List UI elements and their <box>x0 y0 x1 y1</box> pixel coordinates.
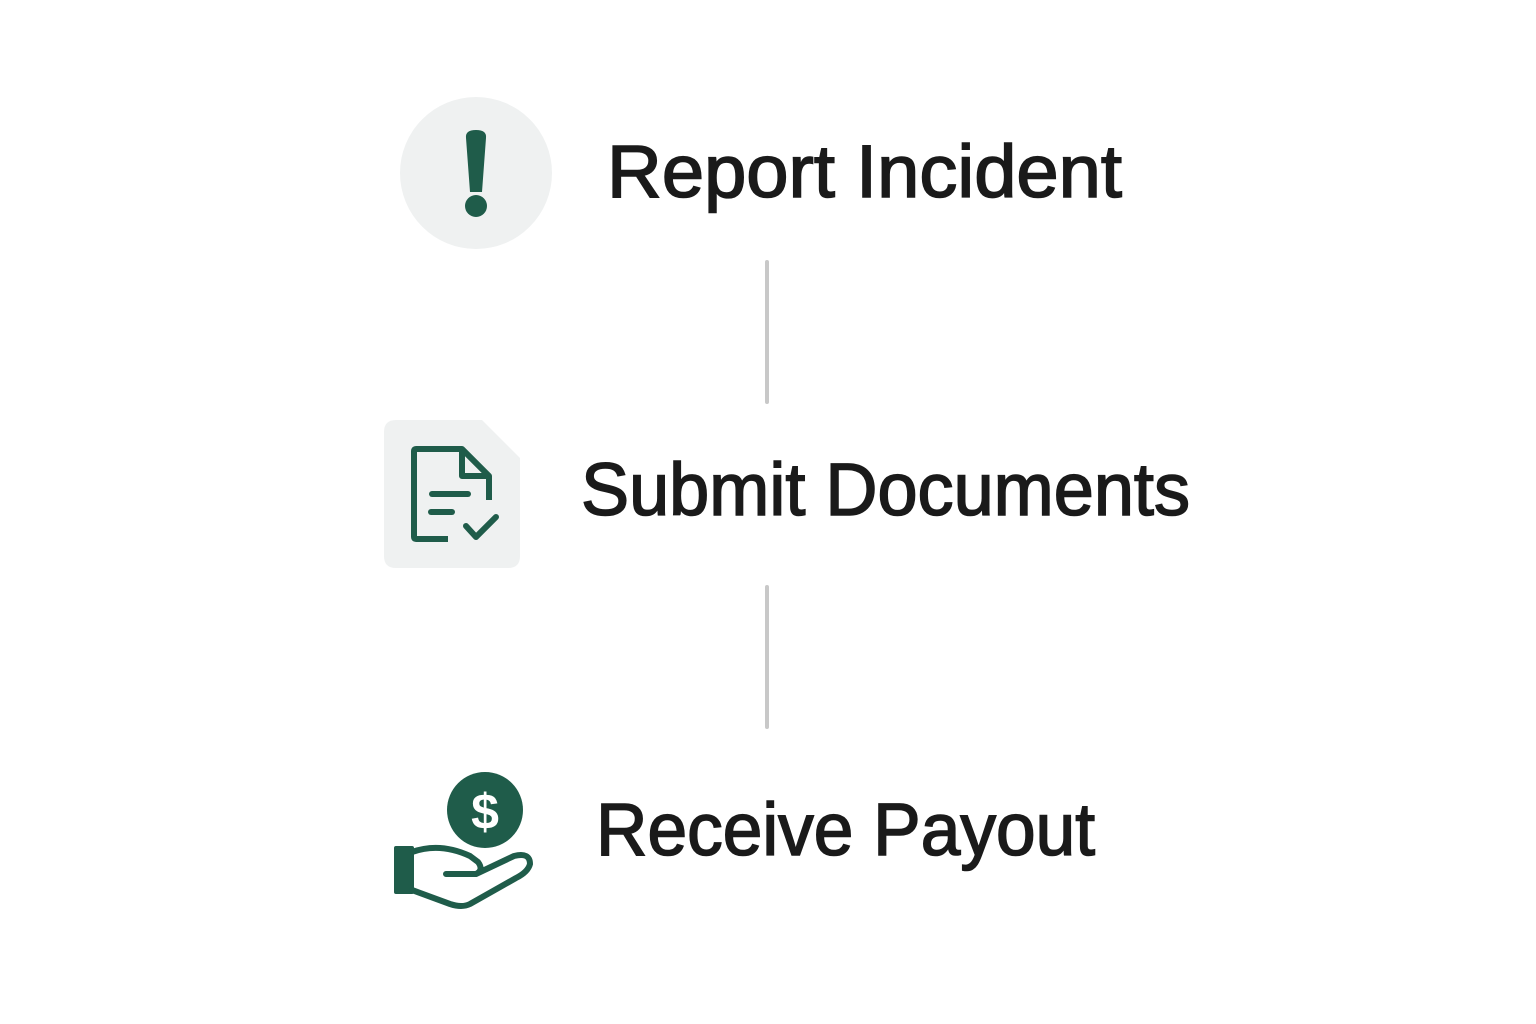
heading: Receive Payout: Receive Payout <box>596 788 1095 871</box>
heading: Submit Documents: Submit Documents <box>581 448 1190 531</box>
icon: exclamation circle <box>400 97 552 249</box>
connector line 1 <box>765 262 769 402</box>
heading: Report Incident: Report Incident <box>607 130 1122 213</box>
icon: document with check <box>384 420 520 568</box>
connector line 2 <box>765 587 769 727</box>
icon: hand with coin <box>394 772 530 906</box>
icon: hand with coin: $ <box>471 784 499 840</box>
